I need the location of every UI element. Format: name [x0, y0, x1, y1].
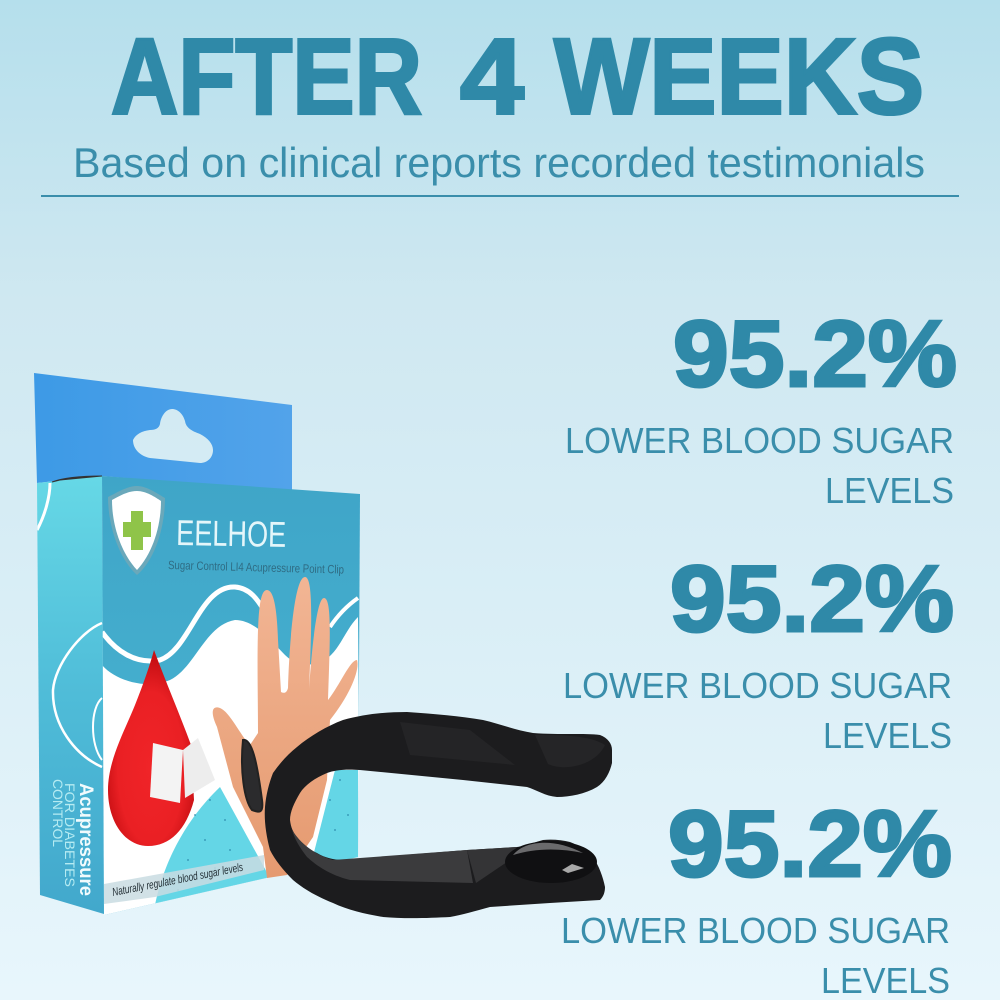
product line: Sugar Control LI4 Acupressure Point Clip [168, 558, 344, 577]
speckled teal area [155, 787, 270, 905]
side panel text: CONTROL [50, 779, 66, 847]
title [111, 16, 924, 136]
box hanger flap [34, 373, 292, 492]
stat 1 label [565, 420, 954, 511]
stat 3 label [561, 910, 950, 1000]
white wave lines [102, 587, 265, 661]
stat 3 value: 95.2% [668, 791, 952, 896]
caption: Naturally regulate blood sugar levels [111, 862, 244, 899]
clip inner band [292, 830, 473, 883]
side panel text: FOR DIABETES [62, 783, 78, 887]
stat 1 label: LEVELS [825, 470, 954, 511]
stat 1 [565, 301, 957, 511]
stat 3 label: LOWER BLOOD SUGAR [561, 910, 950, 951]
side panel text: Acupressure [75, 783, 96, 896]
icon: blood drop with sugar cubes [108, 650, 215, 846]
title: AFTER [111, 16, 422, 136]
brand name: EELHOE [176, 512, 287, 555]
product box [34, 373, 360, 916]
stat 2 label [563, 665, 952, 756]
box front panel [102, 476, 360, 916]
shield logo [108, 486, 165, 575]
subtitle: Based on clinical reports recorded testimonials [73, 139, 925, 186]
stat 2 [563, 546, 954, 756]
caption strip [104, 855, 264, 904]
stat 1 label: LOWER BLOOD SUGAR [565, 420, 954, 461]
icon: hand with clip [213, 577, 358, 878]
stat 2 value: 95.2% [670, 546, 954, 651]
title: WEEKS [554, 16, 924, 136]
clip upper texture [400, 722, 515, 765]
box side panel [37, 476, 104, 914]
white wave panel [102, 617, 360, 916]
stat 2 label: LEVELS [823, 715, 952, 756]
clip pad segment [467, 847, 517, 883]
side panel text [50, 779, 96, 896]
stat 3 label: LEVELS [821, 960, 950, 1000]
stat 2 label: LOWER BLOOD SUGAR [563, 665, 952, 706]
stat 3 [561, 791, 952, 1000]
stat 1 value: 95.2% [673, 301, 957, 406]
title: 4 [460, 16, 524, 136]
clip pressure button [505, 841, 597, 883]
divider [41, 195, 959, 197]
product: black U clip [265, 712, 612, 918]
